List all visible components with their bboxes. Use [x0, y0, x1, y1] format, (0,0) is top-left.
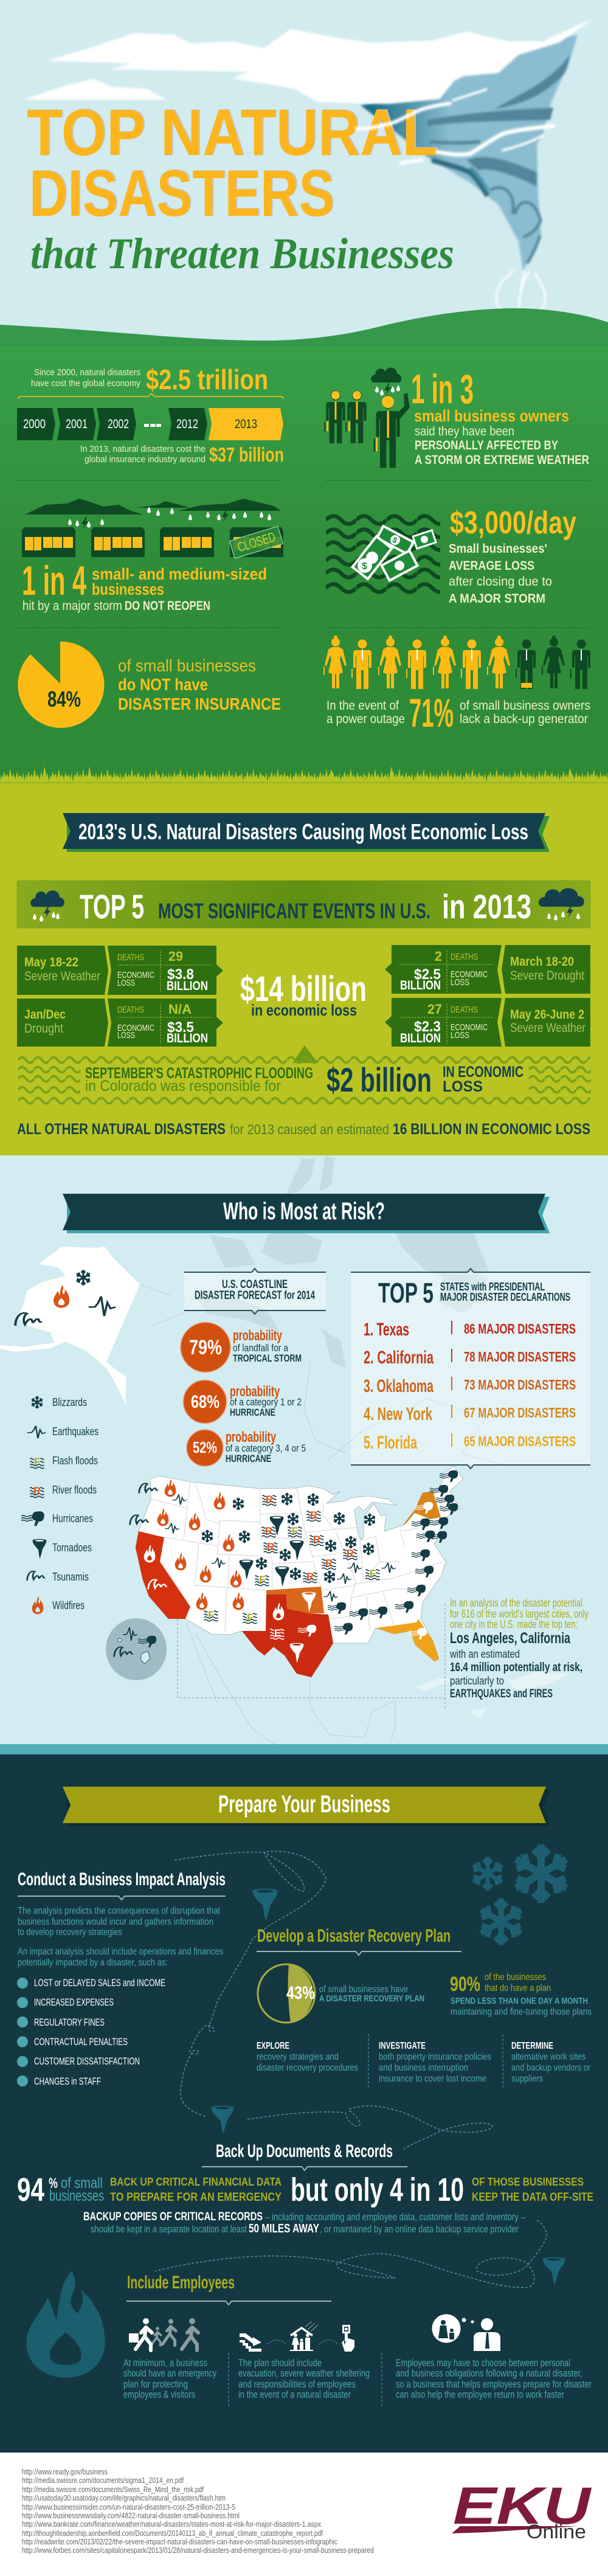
event: Jan/Dec drought: BILLION	[167, 1031, 208, 1045]
stat: 3000 per day average loss	[326, 505, 576, 606]
event: March 18-20 severe drought: March 18-20	[510, 955, 574, 969]
event: Jan/Dec drought: Jan/Dec	[24, 1008, 66, 1022]
icon: storm clouds over buildings	[22, 499, 283, 558]
section: prepare your business	[0, 1744, 608, 2453]
panel: back up documents and records: should be kept in a separate location at least	[91, 2223, 247, 2235]
list: impact items: REGULATORY FINES	[34, 2017, 105, 2028]
stat: 1 in 4 businesses do not reopen: DO NOT REOPEN	[125, 599, 210, 613]
stat: 2.5 trillion cost timeline: $2.5 trillion	[146, 364, 268, 395]
tornado	[361, 35, 578, 271]
stat: 1 in 3 small business owners: small business owners	[414, 407, 569, 425]
legend: disaster types: F	[34, 1456, 40, 1467]
panel: back up documents and records: BACKUP COPIES OF CRITICAL RECORDS	[83, 2211, 263, 2223]
map: New York	[403, 1491, 441, 1525]
stat: 84 percent no disaster insurance: DISASTER INSURANCE	[118, 694, 281, 713]
stat: 1 in 4 businesses do not reopen: businesses	[92, 580, 164, 598]
map: Hawaii inset	[106, 1618, 167, 1680]
event: May 26-June 2 severe weather	[400, 1002, 586, 1045]
stat: 3000 per day average loss: $3,000/day	[450, 505, 576, 541]
stat: 3000 per day average loss: after closing due to	[449, 575, 552, 589]
callout: 14 billion in economic loss: in economic loss	[251, 1001, 357, 1019]
stat: 1 in 4 businesses do not reopen: 1 in 4	[22, 558, 86, 604]
stat: 79 percent tropical storm: probability	[233, 1328, 282, 1344]
stat: 52 percent category 3, 4 or 5	[187, 1429, 306, 1466]
teal band and dark background	[0, 1744, 608, 2453]
stat: 68 percent category 1 or 2: 68%	[191, 1392, 219, 1412]
stat: 84 percent no disaster insurance: do NOT have	[118, 675, 208, 694]
event: May 18-22 severe weather: DEATHS	[117, 952, 144, 963]
event: March 18-20 severe drought: Severe Drought	[510, 969, 584, 983]
column: investigate: both property insurance policies	[379, 2052, 491, 2062]
icon: right storm cloud	[539, 888, 584, 921]
event: Jan/Dec drought: LOSS	[117, 1030, 135, 1040]
event: March 18-20 severe drought: $2.5	[414, 966, 441, 983]
stat: 1 in 4 businesses do not reopen: small- and medium-sized	[92, 565, 267, 583]
green background	[0, 341, 608, 788]
stat: 79 percent tropical storm	[181, 1322, 302, 1372]
pie chart: 84 percent	[18, 642, 104, 728]
light blue map background with faint world outline	[0, 1155, 608, 1754]
closed sign	[229, 526, 283, 558]
map icons: white icons on highlighted states: E	[274, 1627, 281, 1639]
column: personal obligations	[396, 2357, 592, 2400]
list: impact items: INCREASED EXPENSES	[34, 1996, 114, 2008]
callout: 14 billion in economic loss	[240, 969, 367, 1019]
column: emergency plan: plan for protecting	[123, 2378, 188, 2390]
column: explore: recovery strategies and	[257, 2052, 339, 2062]
list: ranked states	[364, 1320, 576, 1453]
panel: back up documents and records: BACK UP CRITICAL FINANCIAL DATA	[110, 2176, 282, 2188]
icon: money in flood waves: $	[391, 535, 399, 545]
decoration: large flame	[26, 2271, 105, 2378]
map icons: flash floods: F	[247, 1612, 253, 1623]
stat: 2.5 trillion cost timeline: global insurance industry around	[85, 454, 206, 465]
column: determine: suppliers	[511, 2074, 543, 2084]
callout: 14 billion in economic loss: $14 billion	[240, 969, 367, 1009]
heading banner: Prepare Your Business	[218, 1791, 390, 1818]
top 5 header bar	[17, 881, 590, 928]
map icons: hurricanes	[328, 1470, 458, 1635]
event: March 18-20 severe drought: LOSS	[451, 977, 469, 988]
column: evacuation plan: The plan should include	[238, 2357, 322, 2369]
map: California	[136, 1531, 190, 1619]
stat: 1 in 3 small business owners: 1 in 3	[411, 366, 474, 412]
panel: conduct a business impact analysis: business functions would incur and gathers information	[18, 1917, 213, 1927]
icon: men under storm cloud	[324, 368, 410, 468]
list: ranked states: 4. New York	[364, 1404, 432, 1424]
stat: 84 percent no disaster insurance: of small businesses	[118, 656, 256, 675]
stat: 52 percent category 3, 4 or 5: 52%	[193, 1438, 217, 1456]
icon: money in flood waves	[326, 514, 440, 594]
map icons: earthquakes	[165, 1495, 396, 1601]
event: March 18-20 severe drought: DEATHS	[451, 952, 478, 962]
sources list: http://www.businessinsider.com/un-natural-disasters-cost-25-trillion-2013-5	[22, 2502, 235, 2512]
panel: back up documents and records: Back Up Documents & Records	[216, 2141, 393, 2161]
list: impact items: CONTRACTUAL PENALTIES	[34, 2036, 128, 2048]
event: March 18-20 severe drought: BILLION	[400, 978, 441, 992]
stat: 71 percent lack a back-up generator: lack a back-up generator	[460, 712, 588, 726]
stat: 2.5 trillion cost timeline: In 2013, natural disasters cost the	[80, 444, 206, 454]
icon: money in flood waves: $	[362, 561, 367, 572]
event: March 18-20 severe drought: 2	[435, 949, 442, 964]
event: May 18-22 severe weather: Severe Weather	[24, 969, 100, 983]
event: March 18-20 severe drought	[400, 949, 584, 992]
text: Los Angeles callout: with an estimated	[449, 1648, 520, 1660]
event: Jan/Dec drought: N/A	[168, 1002, 192, 1017]
icon row: ten employees, seven highlighted	[323, 635, 590, 689]
sky background	[0, 0, 608, 347]
event: May 26-June 2 severe weather: Severe Weather	[510, 1021, 586, 1035]
stat: 2.5 trillion cost timeline: 2012	[176, 417, 198, 431]
panel: back up documents and records: businesses	[49, 2187, 104, 2204]
stat: 3000 per day average loss: Small businesses'	[449, 542, 547, 556]
stat: 84 percent no disaster insurance: 84%	[47, 687, 81, 712]
legend: disaster types: Blizzards	[52, 1396, 87, 1408]
panel: develop a disaster recovery plan: of the businesses	[485, 1972, 546, 1982]
event: May 18-22 severe weather: BILLION	[167, 979, 208, 993]
stat: 2.5 trillion cost timeline: 2013	[235, 417, 257, 431]
map icons: river floods: R	[325, 1557, 333, 1569]
map icons: river floods: R	[266, 1494, 273, 1505]
text: Los Angeles callout: EARTHQUAKES and FIRES	[450, 1688, 553, 1700]
event: Jan/Dec drought: $3.5	[167, 1019, 194, 1036]
stat: 52 percent category 3, 4 or 5: of a category 3, 4 or 5	[226, 1442, 306, 1454]
stat: 84 percent no disaster insurance	[18, 642, 281, 728]
event: Jan/Dec drought	[24, 1002, 208, 1045]
panel: back up documents and records: %	[49, 2175, 58, 2192]
section: 2013 economic loss on lime background	[0, 766, 608, 1155]
sources list: http://readwrite.com/2013/02/22/the-severe-impact-natural-disasters-can-have-on-small-businesses-infographic	[22, 2537, 337, 2546]
column: evacuation plan: evacuation, severe weather sheltering	[238, 2367, 370, 2379]
sources list: http://media.swissre.com/documents/sigma1_2014_en.pdf	[22, 2476, 184, 2485]
panel: back up documents and records: , or maintained by an online data backup service provider	[320, 2223, 519, 2235]
panel: include employees: Include Employees	[127, 2273, 235, 2293]
title: Top Natural Disasters: TOP NATURAL	[27, 95, 438, 169]
map icons: flash floods	[204, 1525, 379, 1624]
event: March 18-20 severe drought: ECONOMIC	[451, 969, 488, 980]
map icons: white icons on highlighted states	[144, 1502, 433, 1663]
panel: top 5 states with major disaster declarations: TOP 5	[378, 1277, 434, 1309]
panel: conduct a business impact analysis: The analysis predicts the consequences of disruption that	[18, 1906, 220, 1916]
top 5 header bar: TOP 5	[80, 887, 144, 926]
stat: 2.5 trillion cost timeline: 2000	[23, 417, 46, 431]
map icons: river floods	[261, 1494, 358, 1583]
legend: disaster types: R	[33, 1485, 41, 1497]
decoration: dashed tornado paths	[155, 1851, 547, 2288]
legend: disaster types: Earthquakes	[52, 1425, 98, 1438]
stat: 1 in 3 small business owners: said they have been	[415, 424, 514, 438]
subtitle: that Threaten Businesses	[30, 229, 454, 278]
stat: 1 in 3 small business owners	[324, 366, 589, 468]
map icons: river floods: R	[265, 1525, 272, 1537]
column: emergency plan: should have an emergency	[123, 2367, 216, 2379]
panel: U.S. coastline disaster forecast: U.S. COASTLINE	[222, 1278, 288, 1291]
column: determine: alternative work sites	[511, 2052, 586, 2062]
event: May 26-June 2 severe weather: BILLION	[400, 1031, 441, 1045]
sources list: http://www.forbes.com/sites/capitalonespark/2013/01/28/natural-disasters-and-emergencies-is-your-small-business-prepared	[22, 2546, 374, 2555]
callout: September flooding in Colorado: IN ECONOMIC	[443, 1064, 523, 1081]
legend: disaster types	[21, 1396, 98, 1614]
list: ranked states: 5. Florida	[364, 1433, 417, 1453]
stat: 1 in 4 businesses do not reopen	[22, 499, 283, 613]
panel: back up documents and records: – including accounting and employee data, customer lists and inventory –	[265, 2211, 525, 2223]
map icons: tsunamis	[130, 1483, 158, 1525]
map icons: blizzards	[202, 1493, 375, 1583]
heading banner	[63, 1194, 550, 1233]
icon: escalator	[240, 2333, 261, 2352]
title: Top Natural Disasters	[27, 95, 438, 230]
icon: hand pressing alarm button	[342, 2325, 354, 2352]
map: states base	[136, 1466, 463, 1677]
text: Los Angeles callout	[449, 1597, 589, 1700]
map icons: flash floods: F	[370, 1568, 376, 1579]
panel: develop a disaster recovery plan: of small businesses have	[319, 1984, 408, 1995]
panel: conduct a business impact analysis: Conduct a Business Impact Analysis	[18, 1869, 226, 1889]
stat: 52 percent category 3, 4 or 5: HURRICANE	[226, 1453, 271, 1464]
event: May 18-22 severe weather	[24, 949, 208, 993]
event: May 26-June 2 severe weather: 27	[427, 1002, 442, 1017]
event: May 26-June 2 severe weather: DEATHS	[451, 1005, 478, 1015]
column: investigate: and business interruption	[379, 2063, 468, 2073]
stat: 68 percent category 1 or 2	[184, 1380, 302, 1423]
list: impact items: CHANGES in STAFF	[34, 2076, 101, 2087]
column: explore: disaster recovery procedures	[257, 2063, 358, 2073]
stat: 2.5 trillion cost timeline: have cost the global economy	[31, 378, 140, 389]
panel: conduct a business impact analysis	[17, 1869, 226, 2087]
hero section: sky, clouds, tornado and title	[0, 0, 608, 365]
sources list: http://thoughtleadership.aonbenfield.com/Documents/20140113_ab_if_annual_climate_catastrophe_report.pdf	[22, 2529, 323, 2538]
sources list	[22, 2467, 374, 2555]
stat: 2.5 trillion cost timeline: 2002	[108, 417, 129, 431]
sources list: http://www.bankrate.com/finance/weather/natural-disasters/states-most-at-risk-for-major-disasters-1.aspx	[22, 2519, 321, 2529]
panel: develop a disaster recovery plan: A DISASTER RECOVERY PLAN	[319, 1993, 424, 2004]
logo: EKU Online: EKU	[453, 2477, 592, 2535]
column: determine	[511, 2041, 591, 2084]
column: determine: DETERMINE	[511, 2041, 553, 2051]
stat: 71 percent lack a back-up generator: 71%	[409, 690, 454, 735]
panel: U.S. coastline disaster forecast: DISASTER FORECAST for 2014	[195, 1289, 315, 1302]
map: Florida	[376, 1619, 439, 1661]
text: all other natural disasters: for 2013 caused an estimated	[230, 1121, 389, 1137]
legend: disaster types: Flash floods	[52, 1455, 98, 1467]
callout: September flooding in Colorado: in Colorado was responsible for	[85, 1078, 281, 1095]
sources list: http://www.ready.gov/business	[22, 2467, 108, 2476]
title: Top Natural Disasters: DISASTERS	[29, 156, 334, 230]
stat: 2.5 trillion cost timeline: Since 2000, natural disasters	[34, 367, 140, 378]
top 5 header bar: MOST SIGNIFICANT EVENTS IN U.S.	[158, 899, 430, 923]
text: all other natural disasters	[17, 1121, 590, 1138]
sources list: http://usatoday30.usatoday.com/life/graphics/natural_disasters/flash.htm	[22, 2493, 226, 2502]
icon: left storm cloud	[30, 890, 64, 922]
map icons: flash floods: F	[208, 1609, 214, 1621]
legend: disaster types: River floods	[52, 1484, 97, 1496]
heading banner	[63, 813, 550, 852]
stat: 68 percent category 1 or 2: probability	[230, 1383, 280, 1400]
footer: sources and logo	[0, 2453, 608, 2576]
map icons: river floods: R	[310, 1509, 317, 1521]
decoration: snowflakes	[473, 1844, 567, 1945]
stat: 68 percent category 1 or 2: of a category 1 or 2	[230, 1396, 302, 1408]
panel: right events	[385, 945, 590, 1047]
stat: 79 percent tropical storm: TROPICAL STORM	[233, 1352, 302, 1364]
list: ranked states: 3. Oklahoma	[364, 1376, 434, 1396]
stat: 3000 per day average loss: A MAJOR STORM	[449, 592, 545, 606]
heading banner: Who is Most at Risk?	[223, 1198, 385, 1225]
panel: back up documents and records: 50 MILES AWAY	[249, 2222, 320, 2235]
column: investigate	[379, 2041, 491, 2084]
panel: top 5 states with major disaster declarations: STATES with PRESIDENTIAL	[440, 1281, 545, 1293]
map: Alaska with hazard icons	[0, 1247, 140, 1405]
clouds	[23, 18, 594, 104]
stat: 71 percent lack a back-up generator: of small business owners	[460, 699, 590, 713]
panel: left events	[17, 946, 223, 1047]
list: impact items	[17, 1977, 165, 2087]
lime background with grass edge	[0, 766, 608, 1155]
panel: conduct a business impact analysis: potentially impacted by a disaster, such as:	[18, 1958, 168, 1968]
legend: disaster types: Tornadoes	[52, 1542, 92, 1554]
stat: 71 percent lack a back-up generator: a power outage	[326, 712, 405, 726]
panel: develop a disaster recovery plan: 90%	[450, 1973, 480, 1996]
map icons: river floods: R	[347, 1548, 354, 1559]
column: explore	[257, 2041, 358, 2073]
text: all other natural disasters: ALL OTHER NATURAL DISASTERS	[17, 1121, 226, 1138]
map: Texas	[242, 1594, 333, 1677]
stat: 71 percent lack a back-up generator	[323, 635, 590, 735]
map icons: wildfires	[157, 1480, 244, 1610]
column: explore: EXPLORE	[257, 2041, 289, 2051]
stat: 1 in 3 small business owners: PERSONALLY AFFECTED BY	[415, 438, 558, 452]
panel: U.S. coastline disaster forecast	[181, 1269, 326, 1466]
panel: develop a disaster recovery plan	[257, 1926, 592, 2089]
event: May 18-22 severe weather: 29	[168, 949, 183, 964]
list: impact items: CUSTOMER DISSATISFACTION	[34, 2055, 140, 2067]
event: Jan/Dec drought: Drought	[24, 1022, 63, 1036]
stat: 71 percent lack a back-up generator: In the event of	[326, 699, 399, 713]
column: investigate: INVESTIGATE	[379, 2041, 426, 2051]
column: determine: and backup vendors or	[511, 2063, 591, 2073]
map icons: tornadoes	[240, 1516, 303, 1587]
panel: back up documents and records: TO PREPARE FOR AN EMERGENCY	[110, 2191, 282, 2204]
event: Jan/Dec drought: DEATHS	[117, 1005, 144, 1015]
event: May 18-22 severe weather: LOSS	[117, 978, 135, 988]
panel: conduct a business impact analysis: to develop recovery strategies	[18, 1927, 122, 1937]
section: global statistics on green background	[0, 308, 608, 788]
chart: 43 percent circle	[258, 1964, 315, 2023]
list: ranked states: 2. California	[364, 1348, 434, 1368]
event: May 26-June 2 severe weather: LOSS	[451, 1030, 469, 1040]
event: May 26-June 2 severe weather: May 26-June 2	[510, 1008, 584, 1022]
decoration: small tornadoes	[212, 1889, 565, 2285]
section: who is most at risk	[0, 1155, 608, 1754]
tornado wisps over the title	[357, 89, 553, 314]
panel: back up documents and records: but only 4 in 10	[291, 2172, 464, 2208]
stat: 52 percent category 3, 4 or 5: probability	[226, 1429, 276, 1446]
list: impact items: LOST or DELAYED SALES and INCOME	[34, 1977, 165, 1989]
icon: family sheltering in house	[290, 2322, 318, 2351]
panel: back up documents and records	[17, 2141, 593, 2235]
stat: 1 in 4 businesses do not reopen: hit by a major storm	[22, 599, 122, 613]
event: May 26-June 2 severe weather: $2.3	[414, 1019, 441, 1035]
stat: 2.5 trillion cost timeline: 2001	[66, 417, 88, 431]
sources list: http://www.businessnewsdaily.com/4822-natural-disaster-small-business.html	[22, 2511, 240, 2520]
map icons: flash floods: F	[292, 1525, 298, 1537]
map icons: river floods: R	[267, 1541, 274, 1553]
callout: September flooding in Colorado	[18, 1045, 591, 1105]
map icons: river floods: R	[313, 1534, 320, 1545]
event: May 18-22 severe weather: $3.8	[167, 966, 194, 983]
stat: 79 percent tropical storm: 79%	[189, 1336, 222, 1359]
closed sign: CLOSED	[236, 529, 277, 555]
callout: September flooding in Colorado: LOSS	[443, 1078, 483, 1095]
sources list: http://media.swissre.com/documents/Swiss_Re_Mind_the_risk.pdf	[22, 2485, 204, 2494]
legend: disaster types: Hurricanes	[52, 1512, 93, 1525]
green hill	[0, 308, 608, 365]
column: evacuation plan: and responsibilities of employees	[238, 2378, 356, 2390]
stat: 68 percent category 1 or 2: HURRICANE	[230, 1407, 275, 1418]
legend: disaster types: Wildfires	[52, 1599, 85, 1612]
panel: develop a disaster recovery plan: that do have a plan	[485, 1983, 551, 1993]
list: ranked states: 1. Texas	[364, 1320, 409, 1340]
panel: top 5 states with major disaster declarations	[351, 1269, 590, 1469]
panel: back up documents and records: OF THOSE BUSINESSES	[472, 2176, 584, 2188]
column: emergency plan: At minimum, a business	[123, 2357, 207, 2369]
callout: September flooding in Colorado: SEPTEMBER'S CATASTROPHIC FLOODING	[85, 1065, 313, 1082]
stat: 3000 per day average loss: AVERAGE LOSS	[449, 559, 534, 573]
column: investigate: insurance to cover lost income	[379, 2074, 486, 2084]
column: emergency plan: employees & visitors	[123, 2389, 195, 2400]
column: evacuation plan	[238, 2357, 370, 2400]
logo: EKU Online: Online	[527, 2521, 586, 2543]
stat: 79 percent tropical storm: of landfall for a	[233, 1342, 288, 1354]
panel: include employees	[123, 2273, 592, 2408]
map: Oklahoma	[266, 1587, 324, 1613]
panel: develop a disaster recovery plan: Develop a Disaster Recovery Plan	[257, 1926, 451, 1946]
legend: disaster types: Tsunamis	[52, 1571, 89, 1583]
panel: back up documents and records: of small	[61, 2175, 103, 2192]
event: May 26-June 2 severe weather: ECONOMIC	[451, 1022, 488, 1033]
stat: 2.5 trillion cost timeline	[17, 364, 284, 466]
stat: 2.5 trillion cost timeline: $37 billion	[209, 443, 284, 466]
column: evacuation plan: in the event of a natural disaster	[238, 2389, 351, 2400]
text: Los Angeles callout: particularly to	[450, 1675, 504, 1687]
heading banner	[63, 1787, 550, 1826]
map icons: river floods: R	[306, 1571, 314, 1582]
map: continental United States	[106, 1466, 463, 1709]
icon: employee thinking of family	[432, 2315, 500, 2351]
column: emergency plan	[123, 2357, 216, 2400]
event: Jan/Dec drought: ECONOMIC	[117, 1023, 154, 1033]
panel: conduct a business impact analysis: An impact analysis should include operations and finances	[18, 1947, 223, 1957]
panel: back up documents and records: 94	[17, 2172, 44, 2208]
map icons: flash floods: F	[259, 1574, 265, 1585]
event: May 18-22 severe weather: ECONOMIC	[117, 970, 154, 980]
top 5 header bar: in 2013	[442, 887, 531, 926]
icon: people walking with briefcase	[129, 2318, 198, 2350]
chart: 43 percent circle: 43%	[286, 1983, 315, 2003]
event: May 18-22 severe weather: May 18-22	[24, 955, 78, 969]
callout: September flooding in Colorado: $2 billion	[326, 1061, 432, 1099]
